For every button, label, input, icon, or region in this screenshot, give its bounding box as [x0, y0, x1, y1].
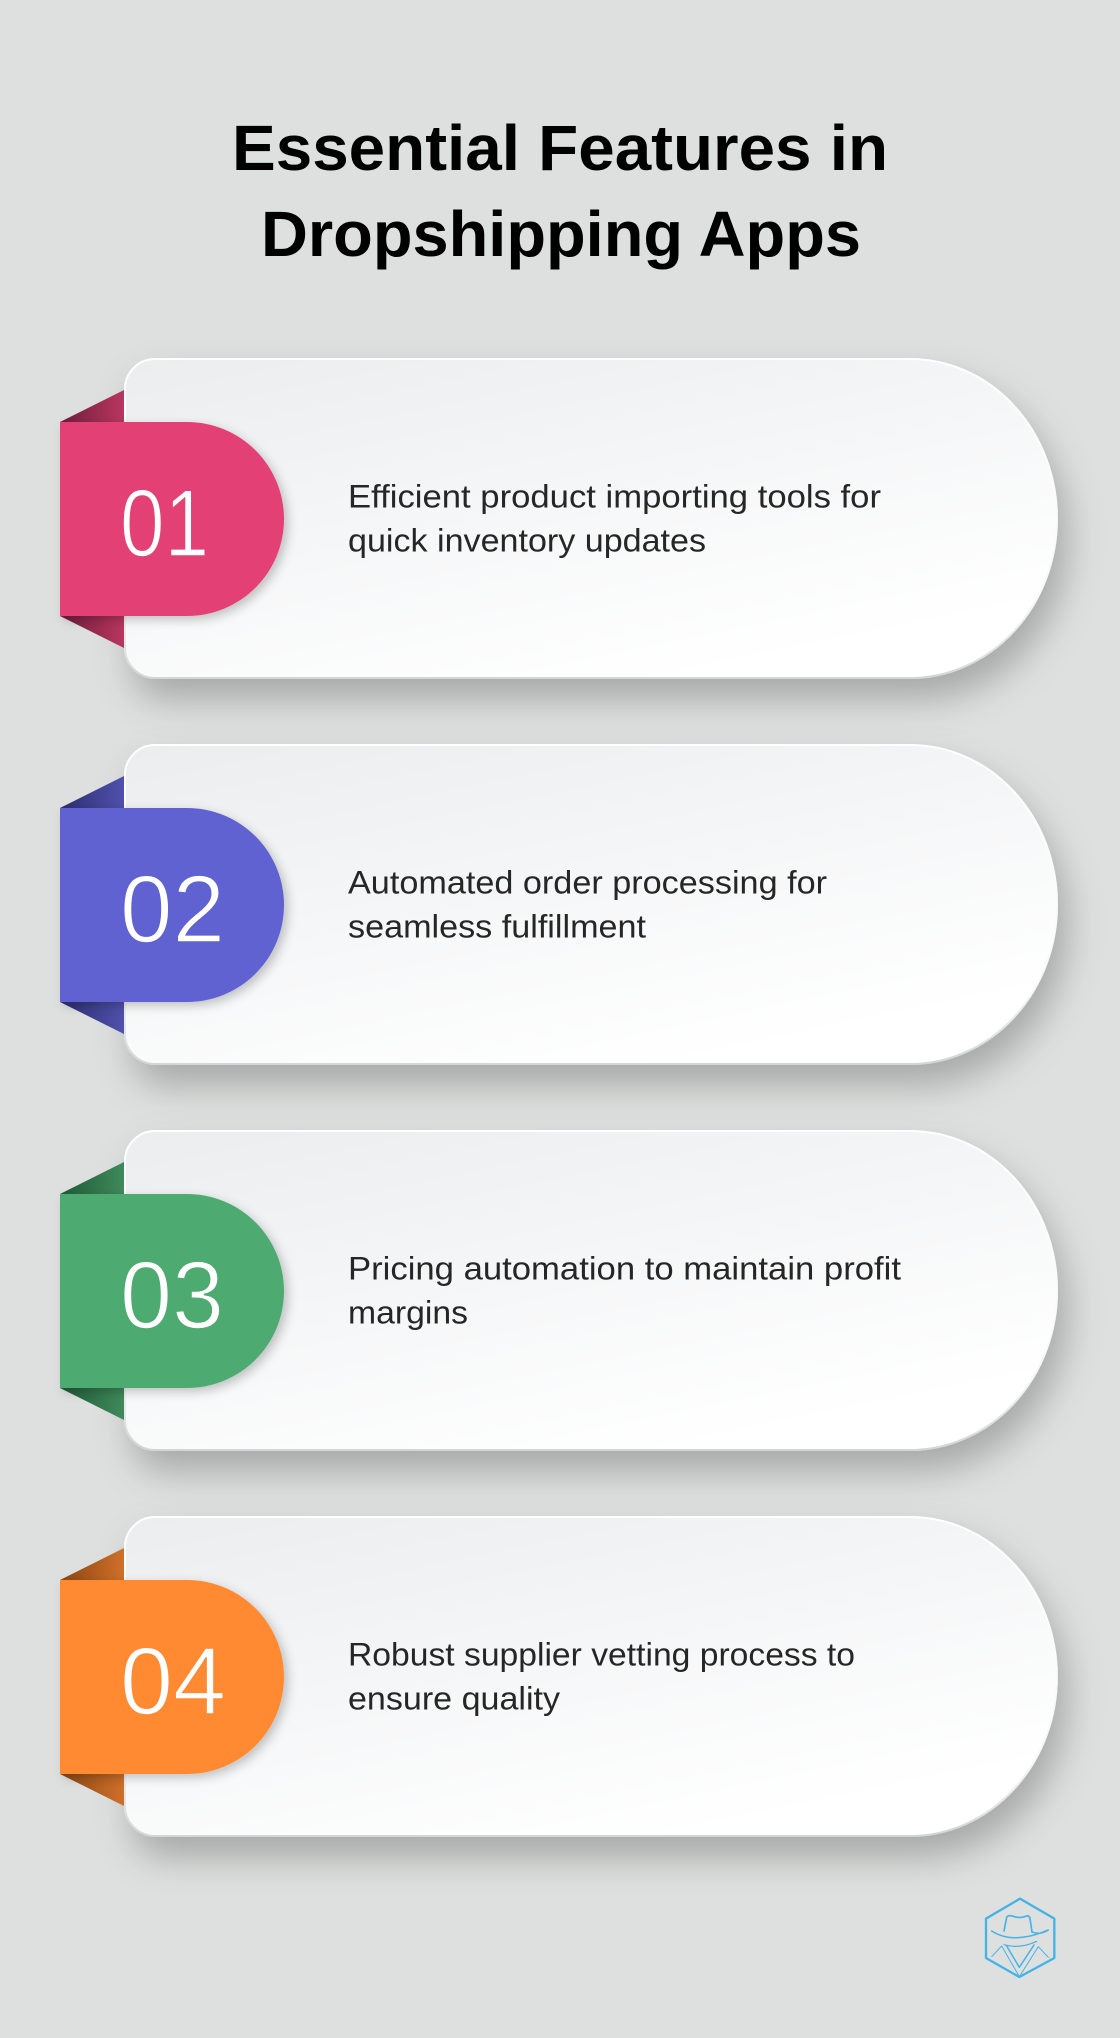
panel: step 04: [60, 1517, 1057, 1836]
number tab 01: [60, 422, 284, 616]
title: Essential Features in: [232, 112, 888, 184]
title: [232, 112, 888, 270]
number tab 02: [60, 808, 284, 1002]
text 03: Pricing automation to maintain profit: [348, 1250, 901, 1286]
text 01: Efficient product importing tools for: [348, 478, 881, 514]
fold: bottom 04: [60, 1774, 124, 1806]
fold: bottom 03: [60, 1388, 124, 1420]
number 02: 02: [120, 856, 225, 963]
card 04: [125, 1517, 1057, 1836]
text 01: [348, 478, 881, 558]
text 02: seamless fulfillment: [348, 908, 646, 944]
text 02: [348, 864, 827, 944]
number tab 03: [60, 1194, 284, 1388]
panel: step 03: [60, 1131, 1057, 1450]
card 03: [125, 1131, 1057, 1450]
fold: top 01: [60, 390, 124, 422]
fold: bottom 01: [60, 616, 124, 648]
number tab 04: [60, 1580, 284, 1774]
text 04: [348, 1636, 855, 1716]
number 01: 01: [120, 470, 209, 577]
title: Dropshipping Apps: [261, 198, 861, 270]
text 02: Automated order processing for: [348, 864, 827, 900]
text 01: quick inventory updates: [348, 522, 706, 558]
text 04: Robust supplier vetting process to: [348, 1636, 855, 1672]
panel: step 02: [60, 745, 1057, 1064]
card 01: [125, 359, 1057, 678]
text 03: margins: [348, 1294, 468, 1330]
panel: step 01: [60, 359, 1057, 678]
fold: top 03: [60, 1162, 124, 1194]
number 03: 03: [120, 1242, 224, 1349]
fold: bottom 02: [60, 1002, 124, 1034]
icon: hexagon spy logo: [986, 1899, 1054, 1977]
card 02: [125, 745, 1057, 1064]
fold: top 02: [60, 776, 124, 808]
text 04: ensure quality: [348, 1680, 560, 1716]
number 04: 04: [120, 1628, 226, 1735]
fold: top 04: [60, 1548, 124, 1580]
text 03: [348, 1250, 901, 1330]
